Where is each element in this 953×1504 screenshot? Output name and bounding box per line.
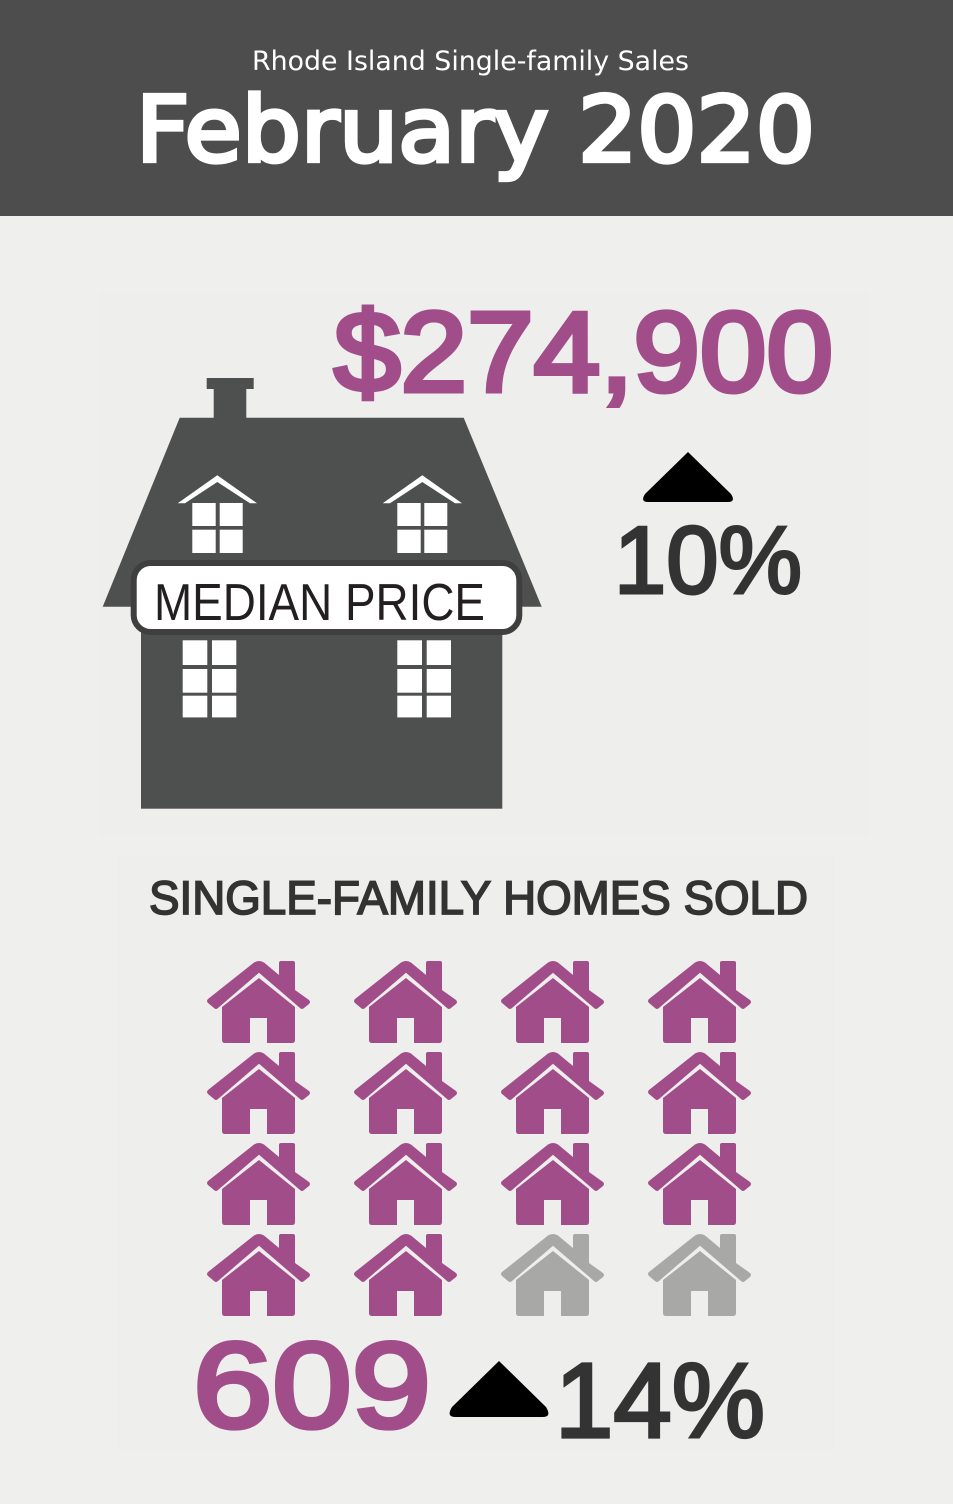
homes sold value: 609 <box>193 1317 431 1453</box>
icon: up arrow sales <box>450 1361 548 1417</box>
icon: large house <box>103 378 542 809</box>
price change: 10% <box>614 507 802 614</box>
panel: header band <box>0 0 953 216</box>
lower left window <box>183 640 236 717</box>
panel: median price <box>99 289 869 837</box>
lower right window <box>397 640 451 717</box>
median price label: MEDIAN PRICE <box>154 574 485 632</box>
icon: up arrow price <box>643 452 733 502</box>
title: February 2020 <box>136 78 815 183</box>
subtitle: Rhode Island Single-family Sales <box>252 46 689 77</box>
homes sold heading: SINGLE-FAMILY HOMES SOLD <box>149 871 808 924</box>
sales change: 14% <box>555 1342 765 1460</box>
upper right window <box>383 475 462 553</box>
median price value: $274,900 <box>334 289 833 415</box>
upper left window <box>178 475 257 553</box>
icon grid: houses <box>207 961 751 1316</box>
panel: homes sold <box>118 855 834 1460</box>
